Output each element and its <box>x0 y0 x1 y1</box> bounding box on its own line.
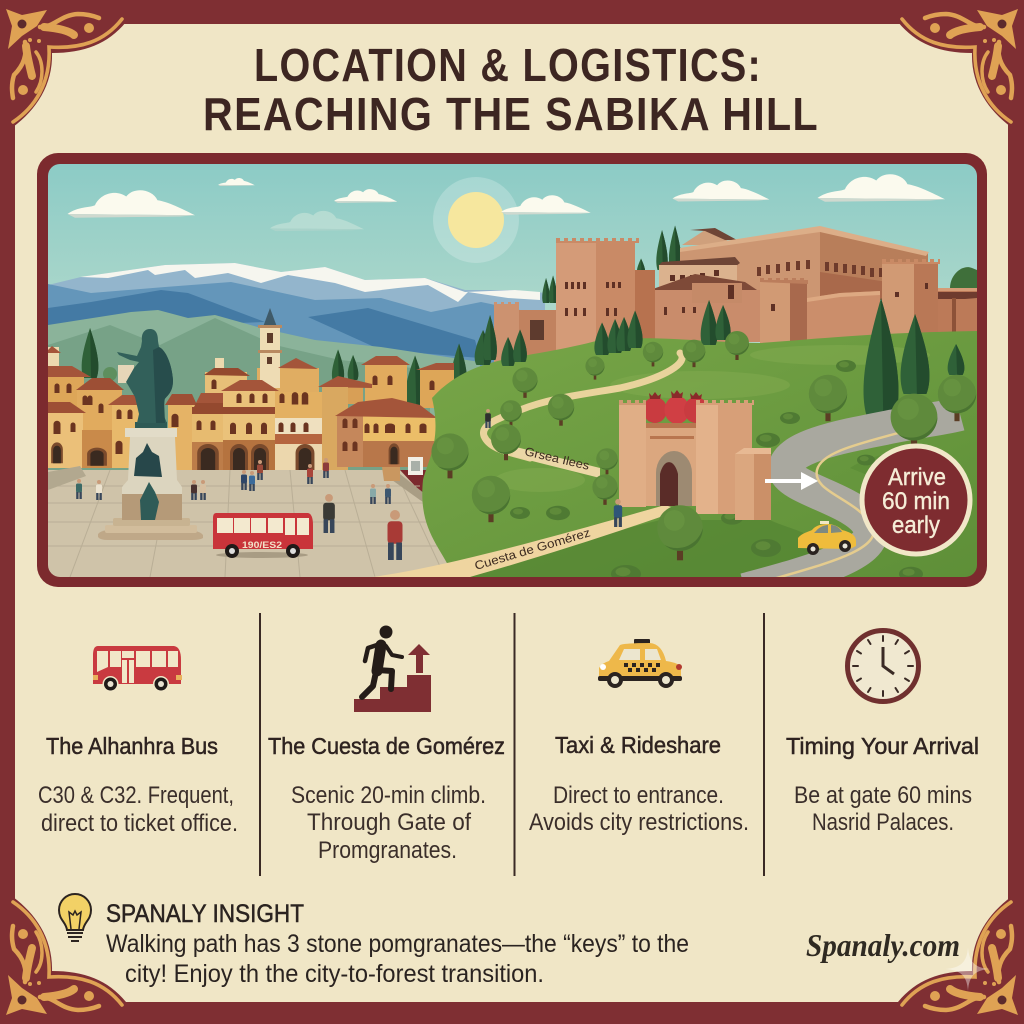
walking path: upper switchback <box>483 353 682 458</box>
description: timing <box>794 782 972 836</box>
title: REACHING THE SABIKA HILL <box>203 88 819 140</box>
icon: light bulb <box>59 894 91 941</box>
three pomegranates <box>643 390 708 424</box>
icon: taxi <box>598 639 682 688</box>
description: timing: Nasrid Palaces. <box>812 809 954 836</box>
arcades <box>51 442 399 470</box>
front right house <box>363 416 436 441</box>
clouds <box>68 174 945 231</box>
description: bus: direct to ticket office. <box>41 810 238 837</box>
center tower <box>760 278 808 344</box>
trees behind the town <box>82 328 467 408</box>
insight block <box>59 894 689 988</box>
brand signature: Spanaly.com <box>806 927 960 963</box>
relief figures <box>134 443 162 477</box>
right tower <box>882 259 940 338</box>
statue monument <box>98 329 203 540</box>
heading: the alhanhra bus: The Alhanhra Bus <box>46 733 218 759</box>
hiker on path <box>614 499 622 527</box>
description: taxi <box>529 782 749 836</box>
description: timing: Be at gate 60 mins <box>794 782 972 809</box>
column dividers <box>260 613 764 876</box>
title <box>203 39 819 140</box>
heading: taxi and rideshare: Taxi & Rideshare <box>555 732 721 758</box>
trees behind fortress <box>542 226 977 303</box>
description: cuesta <box>291 782 486 864</box>
palace block <box>680 226 929 300</box>
alhambra fortress <box>494 226 977 367</box>
hillside shadows <box>495 345 930 492</box>
bell tower <box>258 308 282 388</box>
watermark sparkle <box>945 947 990 991</box>
corner ornament: bottom right <box>898 897 1024 1024</box>
main tower <box>556 238 639 354</box>
back row buildings <box>45 308 454 408</box>
description: bus <box>38 782 238 837</box>
description: bus: C30 & C32. Frequent, <box>38 782 234 809</box>
snow caps <box>80 263 540 302</box>
insight text <box>106 930 689 988</box>
windows <box>54 376 434 454</box>
description: cuesta: Promgranates. <box>318 837 457 864</box>
left tower and wall <box>494 302 556 367</box>
column: the alhambra bus <box>38 646 238 837</box>
icon: clock <box>848 630 918 702</box>
callout: arrive 60 min early: 60 min <box>882 488 950 515</box>
dark ridges <box>48 290 264 325</box>
town <box>45 308 467 470</box>
hillside trees <box>475 298 964 418</box>
description: taxi: Avoids city restrictions. <box>529 809 749 836</box>
main row buildings <box>48 366 437 470</box>
far range <box>50 270 545 312</box>
green foothills <box>48 310 480 470</box>
title: LOCATION & LOGISTICS: <box>254 39 762 91</box>
corner ornament: top right <box>898 0 1024 127</box>
green hill <box>422 331 977 577</box>
description: cuesta: Through Gate of <box>307 809 471 836</box>
more hillside trees <box>431 331 976 583</box>
description: taxi: Direct to entrance. <box>553 782 724 809</box>
insight text: city! Enjoy th the city-to-forest transition. <box>125 960 544 988</box>
column: timing your arrival <box>786 630 979 836</box>
corner ornament: top left <box>0 0 126 127</box>
sky <box>48 164 977 343</box>
bus in plaza <box>213 513 313 558</box>
bus in plaza: 190/ES2 <box>242 540 282 551</box>
column: the cuesta de gomerez <box>268 626 505 864</box>
plaza people <box>76 458 402 560</box>
path banner: Grsea Ilees <box>512 448 600 478</box>
plaza paving <box>48 457 460 577</box>
panel: illustrated map scene <box>37 153 987 590</box>
mid-level halls <box>658 257 740 266</box>
heading: the cuesta de gomerez: The Cuesta de Gomérez <box>268 733 505 759</box>
corner ornament: bottom left <box>0 897 126 1024</box>
lower walls <box>648 290 761 342</box>
cuesta de gomerez path <box>373 505 680 577</box>
heading: timing your arrival: Timing Your Arrival <box>786 733 979 759</box>
road <box>745 414 960 590</box>
hiker on upper path <box>485 409 491 428</box>
mid range <box>48 282 520 370</box>
icon: bus <box>93 646 182 692</box>
callout: arrive 60 min early: Arrive <box>888 464 946 491</box>
grass island by road <box>850 452 925 480</box>
callout: arrive 60 min early: early <box>892 512 940 539</box>
insight heading: SPANALY INSIGHT <box>106 900 304 928</box>
sun <box>433 177 519 263</box>
taxi on road <box>798 521 856 555</box>
icon: person climbing stairs <box>354 626 431 712</box>
gate of the pomegranates <box>619 390 771 520</box>
statue figure <box>117 329 173 423</box>
description: cuesta: Scenic 20-min climb. <box>291 782 486 809</box>
white direction arrow <box>765 472 818 490</box>
path label: Cuesta de Gomérez: Cuesta de Gomérez <box>473 525 592 573</box>
stepped base <box>98 518 203 540</box>
callout: arrive 60 min early <box>862 446 970 554</box>
tree in front of gate <box>657 505 703 560</box>
mountains <box>48 263 545 370</box>
path banner: Grsea Ilees: Grsea Ilees <box>523 444 591 473</box>
column: taxi and rideshare <box>529 639 749 836</box>
insight text: Walking path has 3 stone pomgranates—the “keys” to the <box>106 930 689 958</box>
